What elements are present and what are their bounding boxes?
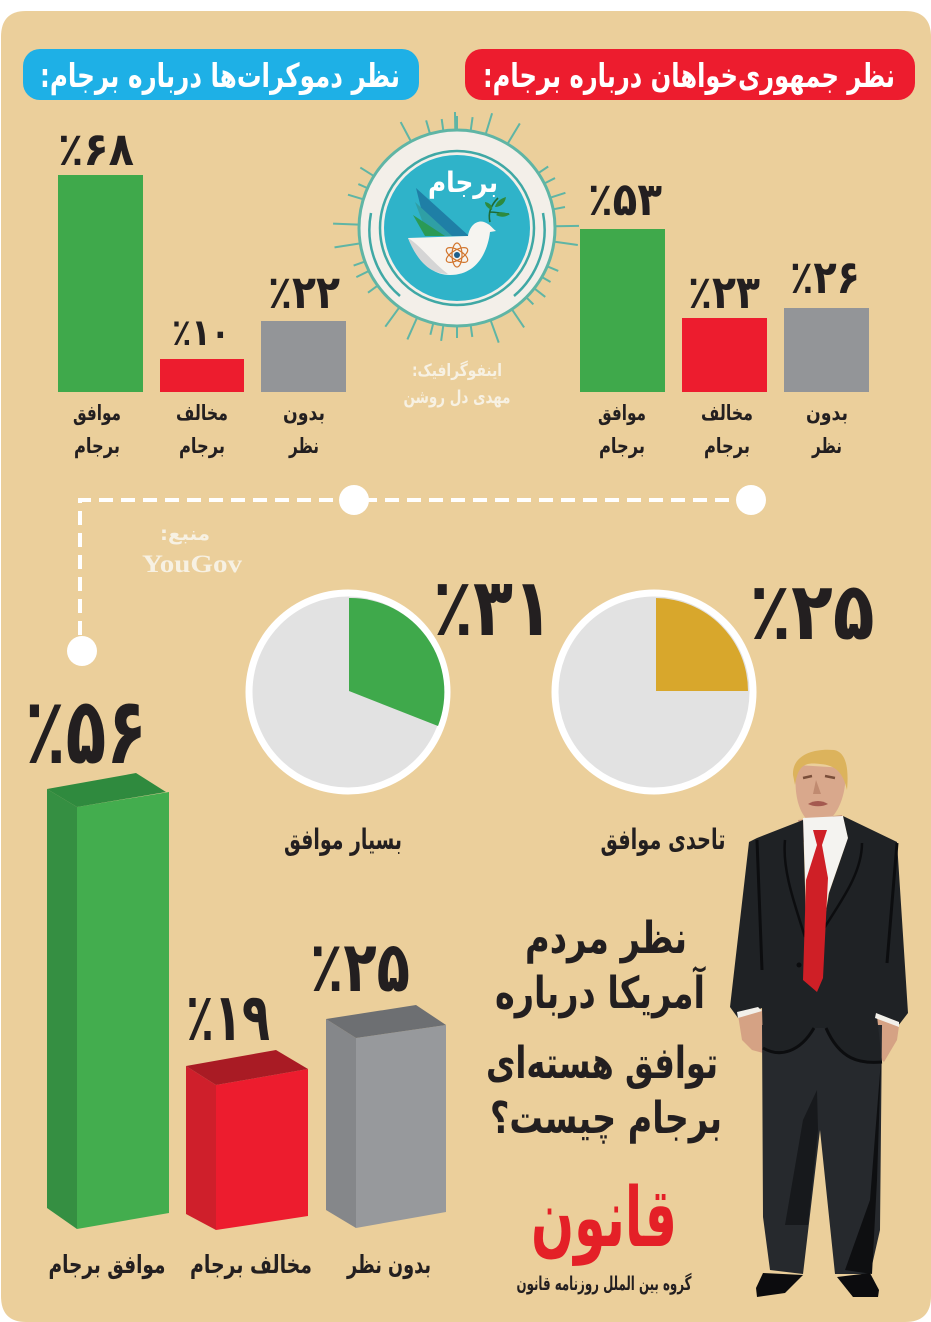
bar chart: democrats: ٪۱۰ (172, 311, 230, 354)
3D bar: oppose 19%: مخالف برجام (190, 1250, 312, 1280)
bar chart: democrats: بدون (283, 401, 325, 425)
credit text: اینفوگرافیک: (412, 360, 502, 381)
heading: main question: آمریکا درباره (495, 965, 706, 1019)
logo: Ghanoon newspaper: گروه بین الملل روزنامه قانون (516, 1272, 692, 1295)
bar chart: democrats (58, 122, 346, 458)
heading: main question: برجام چیست؟ (490, 1093, 722, 1144)
pie chart: somewhat agree 25% (555, 565, 874, 856)
3D bar: oppose 19% (186, 979, 312, 1280)
3D bar: oppose 19%: ٪۱۹ (186, 979, 270, 1056)
icon: JCPOA dove emblem: برجام (428, 166, 498, 199)
dashed connector with nodes (67, 485, 766, 666)
bar chart: republicans: بدون (806, 401, 848, 425)
heading: main question (486, 913, 722, 1144)
bar chart: democrats: نظر (288, 434, 319, 458)
bar chart: republicans: برجام (704, 434, 750, 458)
credit text (404, 360, 510, 408)
icon: JCPOA dove emblem (333, 112, 579, 343)
heading: main question: نظر مردم (525, 913, 687, 964)
bar chart: democrats: برجام (179, 434, 225, 458)
3D bar: no opinion 25%: ٪۲۵ (310, 926, 410, 1008)
bar chart: democrats: ٪۶۸ (58, 122, 134, 176)
3D bar: no opinion 25% (310, 926, 446, 1280)
panel: democrats heading: نظر دموکرات‌ها درباره برجام: (40, 56, 400, 96)
source text: منبع: (160, 523, 210, 545)
panel: democrats heading (23, 49, 419, 100)
logo: Ghanoon newspaper: قانون (531, 1171, 677, 1266)
source text (142, 523, 243, 578)
bar chart: republicans: ٪۲۶ (790, 250, 860, 304)
credit text: مهدی دل روشن (404, 387, 510, 408)
bar chart: republicans: ٪۲۳ (688, 265, 760, 319)
bar chart: democrats: موافق (73, 401, 121, 425)
source text: YouGov (142, 551, 243, 578)
pie chart: somewhat agree 25%: ٪۲۵ (750, 565, 874, 658)
logo: Ghanoon newspaper (516, 1171, 692, 1295)
bar chart: republicans (580, 172, 869, 458)
bar chart: democrats: ٪۲۲ (268, 265, 340, 319)
bar chart: republicans: ٪۵۳ (588, 172, 662, 226)
heading: main question: توافق هسته‌ای (486, 1038, 718, 1089)
3D bar: no opinion 25%: بدون نظر (346, 1250, 431, 1280)
bar chart: democrats: مخالف (176, 401, 228, 425)
pie chart: strongly agree 31% (249, 561, 553, 856)
3D bar: agree 56% (25, 678, 169, 1280)
bar chart: republicans: موافق (598, 401, 646, 425)
bar chart: republicans: مخالف (701, 401, 753, 425)
pie chart: strongly agree 31%: بسیار موافق (284, 823, 402, 856)
pie chart: somewhat agree 25%: تاحدی موافق (600, 823, 726, 856)
3D bar: agree 56%: ٪۵۶ (25, 678, 147, 785)
illustration: Trump (730, 750, 908, 1297)
bar chart: republicans: برجام (599, 434, 645, 458)
3D bar: agree 56%: موافق برجام (48, 1250, 166, 1280)
bar chart: republicans: نظر (811, 434, 842, 458)
bar chart: democrats: برجام (74, 434, 120, 458)
pie chart: strongly agree 31%: ٪۳۱ (433, 561, 553, 654)
